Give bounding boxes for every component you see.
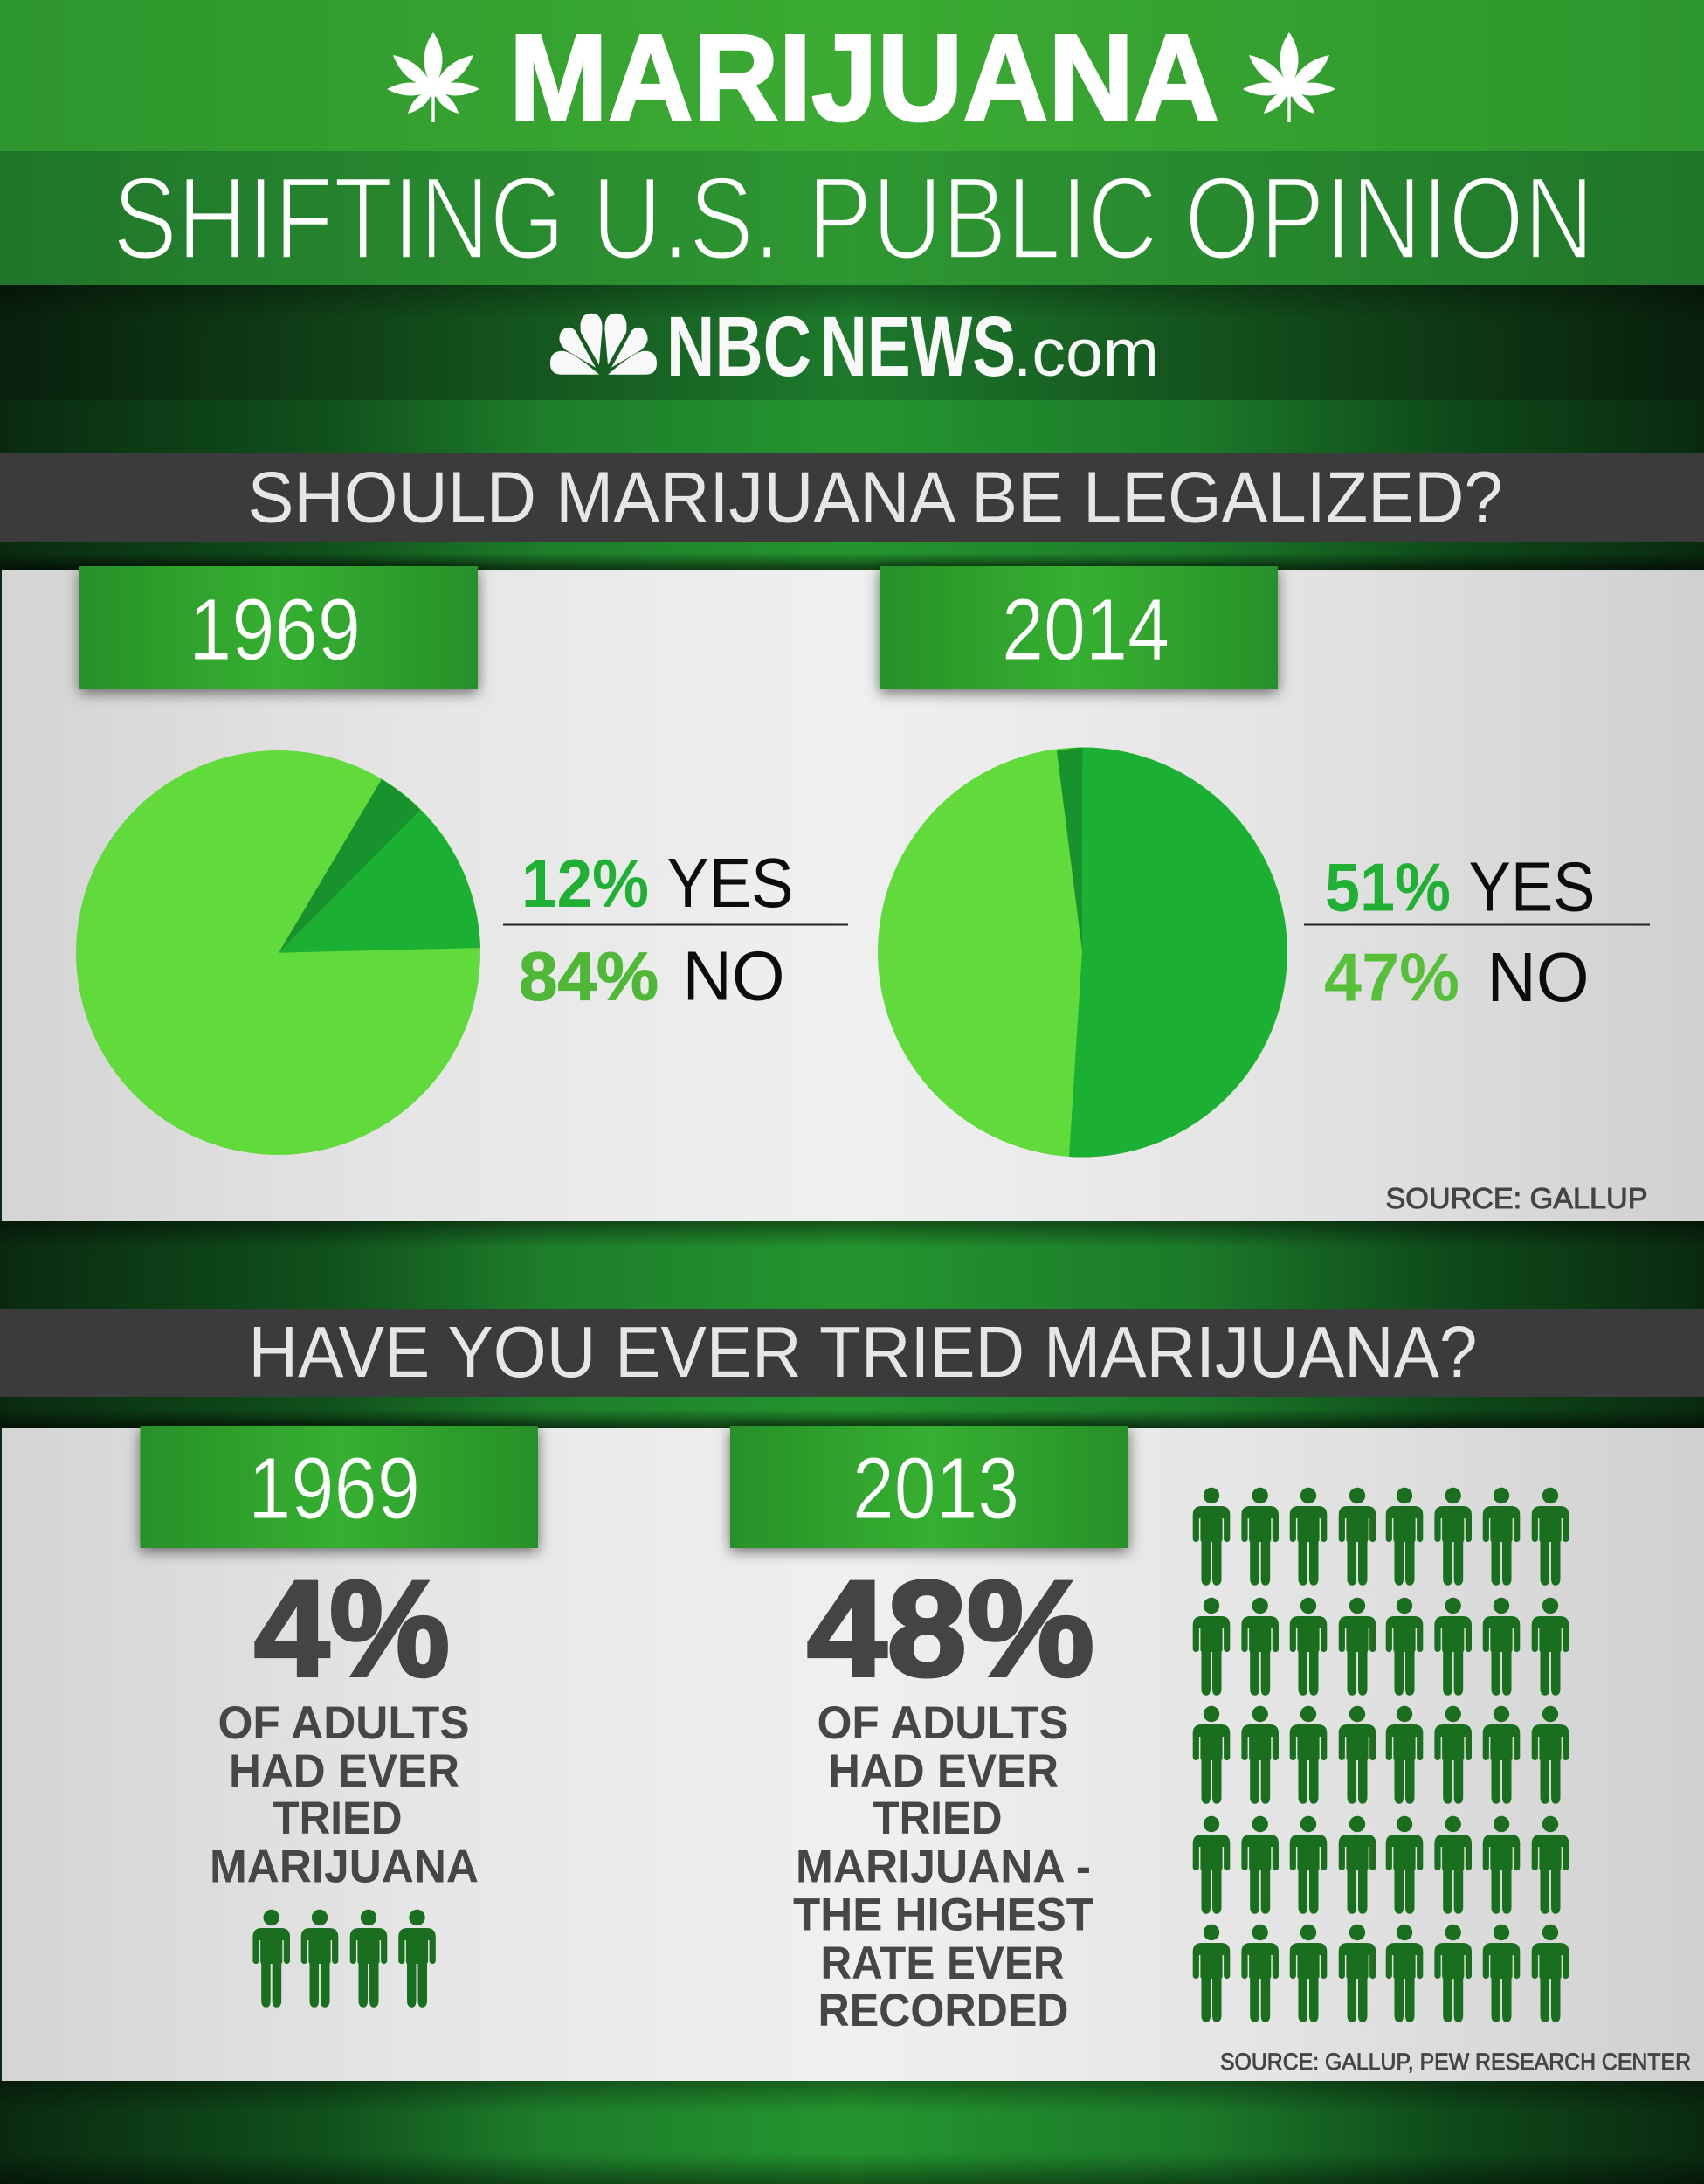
year tab: 1969: 1969 [189,581,361,679]
legend: 2014 results [1304,847,1650,1016]
caption: 2013: MARIJUANA - [796,1842,1091,1892]
caption: 1969 [210,1697,479,1892]
icons: forty people grid [1193,1488,1569,2022]
logo wordmark: .com: .com [1013,315,1159,390]
caption: 2013: THE HIGHEST [793,1889,1093,1941]
legend: 1969 results: 84% [519,938,659,1015]
caption: 1969: HAD EVER [229,1745,459,1797]
pie chart: 2014 [878,748,1287,1157]
header band: title [0,0,1704,151]
panel: ever tried poll [2,1426,1704,2081]
caption: 2013: TRIED [873,1793,1003,1844]
background strip below second question [0,1397,1704,1428]
legend: 1969 results: 12% [521,845,649,922]
legend: 2014 results: 51% [1325,849,1451,926]
year tab: 1969 [79,566,478,689]
year tab: 2014 [880,566,1278,689]
logo wordmark: NBC: NBC [666,299,811,394]
year tab: 2013 [730,1426,1128,1548]
background strip above second question [0,1221,1704,1309]
caption: 2013: RATE EVER [821,1938,1064,1989]
year tab: 2013: 2013 [852,1440,1019,1538]
background strip below first question [0,542,1704,570]
footer band [0,2081,1704,2184]
heading text: HAVE YOU EVER TRIED MARIJUANA? [248,1311,1478,1393]
icon: NBC peacock [550,314,657,375]
logo wordmark: NEWS: NEWS [820,299,1016,394]
caption: 2013: HAD EVER [828,1745,1059,1797]
caption: 2013: RECORDED [818,1985,1069,2036]
caption: 2013 [793,1697,1093,2036]
caption: 1969: MARIJUANA [210,1842,479,1892]
legend: 1969 results: NO [683,936,784,1015]
pie chart: 1969 [76,750,480,1155]
legend: 1969 results: YES [667,844,793,922]
caption: 2013: OF ADULTS [818,1697,1069,1749]
year tab: 2014: 2014 [1002,581,1169,679]
caption: 1969: OF ADULTS [218,1697,470,1749]
background strip above first question [0,400,1704,453]
heading band: have you ever tried marijuana [0,1309,1704,1397]
logo band: NBC News [0,285,1704,400]
year tab: 1969: 1969 [248,1440,420,1538]
caption: 1969: TRIED [273,1793,402,1844]
heading text: SHOULD MARIJUANA BE LEGALIZED? [248,456,1502,538]
legend: 2014 results: 47% [1324,938,1459,1015]
legend: 2014 results: YES [1469,847,1595,926]
heading band: should marijuana be legalized [0,453,1704,542]
legend: 2014 results: NO [1487,938,1590,1016]
subtitle band [0,151,1704,285]
big stat: 48 percent: 48% [807,1553,1094,1705]
icons: four people [252,1910,436,2008]
icon: right cannabis leaf [1243,32,1335,122]
year tab: 1969 [140,1426,538,1548]
title: MARIJUANA: MARIJUANA [509,9,1219,147]
big stat: 4 percent: 4% [254,1553,450,1705]
panel: legalization poll [2,566,1704,1221]
icon: left cannabis leaf [387,32,479,122]
source note: Gallup: SOURCE: GALLUP [1385,1183,1647,1215]
legend: 1969 results [503,844,848,1015]
